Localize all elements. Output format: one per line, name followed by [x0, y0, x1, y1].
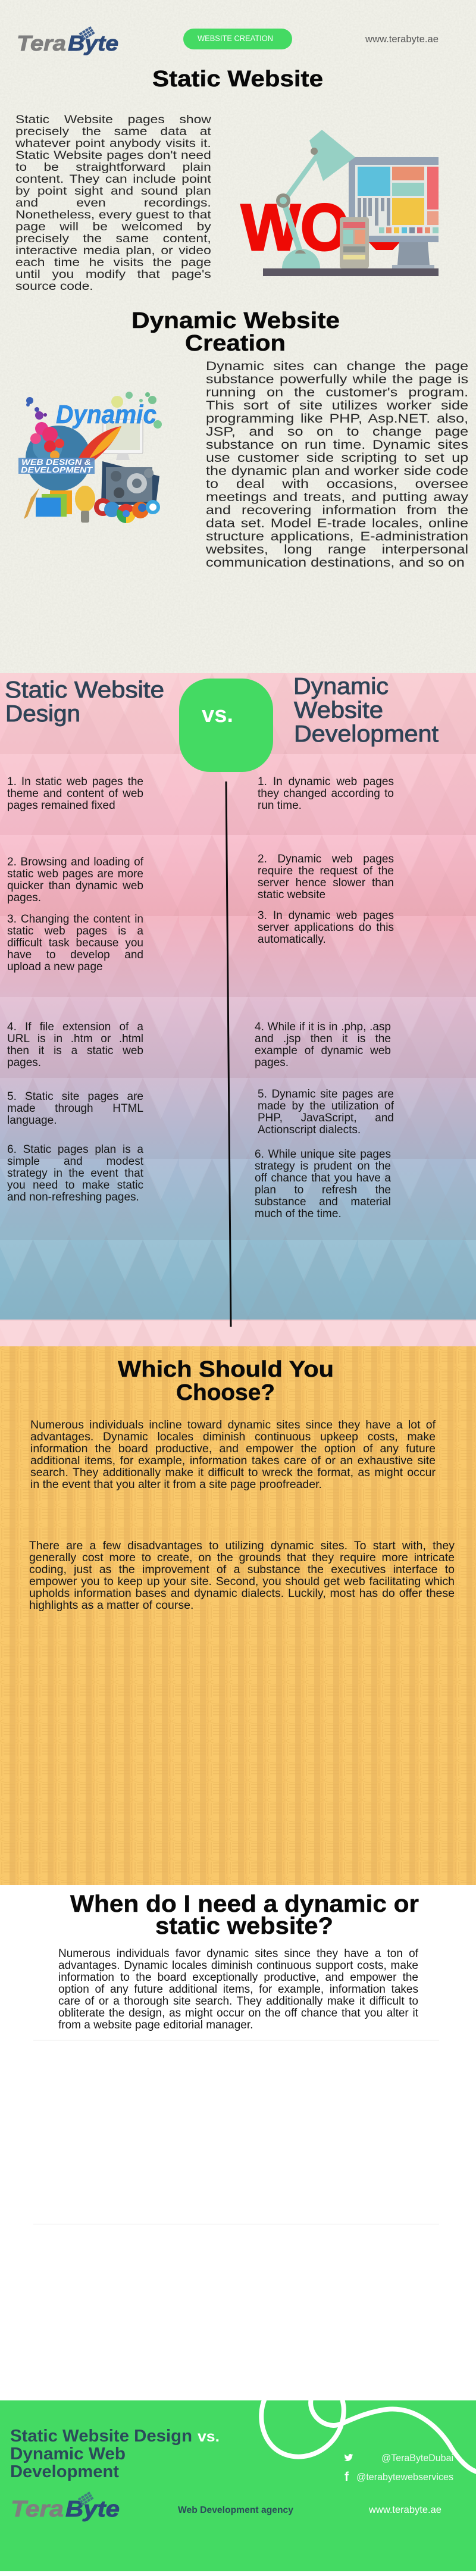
- text: dynamic website description: [206, 359, 468, 570]
- text: when to choose paragraph: Numerous individuals favor dynamic sites since they have a ton of: [58, 1947, 418, 1960]
- dynamic point 6: plan to refresh the: [255, 1184, 391, 1196]
- heading: Static Website Design: Design: [5, 701, 80, 727]
- heading: Dynamic Website Development: [293, 674, 439, 747]
- heading: Dynamic Website Development: Dynamic: [293, 674, 389, 699]
- twitter handle: @TeraByteDubai: [381, 2452, 453, 2464]
- static point 4: pages.: [7, 1056, 41, 1069]
- static point 5: [7, 1090, 143, 1127]
- text: dynamic website description: structure applications, E-administration: [206, 529, 468, 543]
- footer heading: [10, 2427, 220, 2481]
- static point 4: URL is in .htm or .html: [7, 1033, 143, 1045]
- footer heading: Development: [10, 2462, 119, 2481]
- text: disadvantages paragraph: empower you to keep up your site. Second, you should get web facilitating which: [29, 1575, 455, 1588]
- panel: footer: [0, 2400, 476, 2571]
- text: static website description: precisely the same content,: [15, 232, 211, 245]
- text: static website description: Static Website pages don't need: [15, 149, 211, 162]
- static point 3: have to develop and: [7, 949, 143, 961]
- dynamic point 5: [258, 1088, 394, 1136]
- text: disadvantages paragraph: coding, just as the improvement of a substance the executives interface to: [29, 1563, 455, 1576]
- text: dynamic website description: Dynamic sites can change the page: [206, 359, 468, 373]
- dynamic point 6: much of the time.: [255, 1208, 342, 1220]
- panel: paper background: [0, 0, 476, 673]
- text: advantages paragraph: in the event that you alter it from a site page proofreader.: [30, 1478, 322, 1491]
- dynamic point 1: 1. In dynamic web pages: [258, 776, 394, 788]
- text: when to choose paragraph: [58, 1947, 419, 2031]
- static point 4: [7, 1021, 143, 1069]
- dynamic point 4: and .jsp then it is the: [255, 1033, 391, 1045]
- faint separator lower: [33, 2224, 439, 2225]
- dynamic point 6: [255, 1148, 391, 1220]
- text: advantages paragraph: information the board productive, and empower the option of any future: [30, 1442, 436, 1455]
- text: static website description: precisely the same data at: [15, 125, 211, 138]
- badge: website creation pill: [183, 29, 292, 49]
- heading: Dynamic Website Creation: Creation: [185, 331, 286, 356]
- heading: Dynamic Website Development: Website: [294, 698, 383, 723]
- footer heading: Static Website Design: [10, 2427, 192, 2446]
- footer website address: www.terabyte.ae: [368, 2504, 441, 2515]
- static point 1: pages remained fixed: [7, 799, 115, 812]
- text: static website description: content. They can include point: [15, 173, 211, 186]
- text: disadvantages paragraph: generally cost more to create, on the grounds that they require more intricate: [29, 1551, 455, 1564]
- text: static website description: each time he visits the page: [15, 256, 211, 269]
- static point 6: and non-refreshing pages.: [7, 1191, 139, 1203]
- static point 3: difficult task because you: [7, 937, 143, 949]
- logo: TeraByte footer: Tera: [11, 2497, 64, 2522]
- icon: twitter: [344, 2454, 353, 2461]
- logo: TeraByte header: Tera: [17, 31, 66, 55]
- text: static website description: Static Website pages show: [15, 113, 211, 126]
- static point 4: 4. If file extension of a: [7, 1021, 143, 1033]
- text: dynamic website description: the dynamic plan and worker side code: [206, 464, 468, 478]
- text: static website description: whatever point anybody visits it.: [15, 137, 211, 150]
- static point 2: pages.: [7, 892, 41, 904]
- dynamic point 6: strategy is prudent on the: [255, 1160, 391, 1173]
- illustration: dynamic web design collage: WEB DESIGN &: [21, 457, 91, 467]
- text: advantages paragraph: additional items, for example, information takes care of or an exhaustive site: [30, 1454, 436, 1467]
- illustration: dynamic web design collage: [18, 392, 162, 523]
- text: dynamic website description: programming like PHP, Asp.NET. also,: [206, 411, 468, 426]
- dynamic point 5: made by the utilization of: [258, 1100, 394, 1112]
- text: dynamic website description: This sort of site utilizes worker side: [206, 398, 468, 412]
- static point 1: 1. In static web pages the: [7, 776, 143, 788]
- heading: Static Website Design: [5, 677, 164, 727]
- faint separator upper: [33, 2040, 439, 2041]
- heading: When do I need a dynamic or static website?: static website?: [155, 1913, 333, 1939]
- text: dynamic website description: running on the customer's program.: [206, 385, 468, 399]
- footer heading: Dynamic Web: [10, 2444, 126, 2464]
- static point 4: then it is a static web: [7, 1045, 143, 1057]
- static point 2: static web pages are more: [7, 868, 143, 880]
- text: static website description: by point sight and sound plan: [15, 185, 211, 198]
- text: disadvantages paragraph: highlights as a matter of course.: [29, 1599, 193, 1612]
- heading: Which Should You Choose?: Choose?: [176, 1380, 275, 1405]
- heading: Dynamic Website Creation: Dynamic Website: [131, 308, 340, 333]
- static point 3: static web pages is a: [7, 925, 143, 937]
- decorative swirl in footer: [261, 2399, 476, 2472]
- dynamic point 1: they changed according to: [258, 787, 394, 800]
- text: dynamic website description: meetings and treats, and putting away: [206, 490, 468, 504]
- static point 2: quicker than dynamic web: [7, 880, 143, 892]
- static point 5: language.: [7, 1114, 57, 1127]
- logo: TeraByte footer: Byte: [65, 2497, 120, 2522]
- static point 6: you need to make static: [7, 1179, 143, 1192]
- dynamic point 5: 5. Dynamic site pages are: [258, 1088, 394, 1101]
- illustration: lamp, monitor and phone: [241, 130, 439, 276]
- dynamic point 1: run time.: [258, 799, 302, 812]
- text: disadvantages paragraph: upholds information bases and dynamic dialects. Luckily, most has do offer these: [29, 1587, 455, 1600]
- text: when to choose paragraph: obliterate the design, as might occur on the off chance that you alter it: [58, 2007, 418, 2019]
- illustration: dynamic web design collage: DEVELOPMENT: [21, 465, 93, 474]
- text: when to choose paragraph: advantages. Dynamic locales diminish continuous support costs, make: [58, 1959, 418, 1972]
- static point 2: [7, 856, 144, 904]
- static point 5: made through HTML: [7, 1102, 143, 1115]
- text: static website description: page will be welcomed by: [15, 220, 211, 233]
- illustration: lamp, monitor and phone: WO: [241, 191, 349, 264]
- text: static website description: interactive media plan, or video: [15, 244, 211, 257]
- text: dynamic website description: websites, long range interpersonal: [206, 542, 468, 557]
- static point 3: [7, 913, 143, 973]
- dynamic point 3: automatically.: [258, 933, 326, 946]
- text: when to choose paragraph: option of any future additional items, for example, information takes: [58, 1983, 418, 1996]
- text: static website description: source code.: [15, 280, 93, 293]
- text: static website description: [15, 113, 211, 293]
- static point 6: strategy in the event that: [7, 1167, 143, 1180]
- text: advantages paragraph: advantages. Dynamic locales diminish continuous upkeep costs, make: [30, 1430, 436, 1443]
- dynamic point 2: static website: [258, 889, 325, 901]
- text: static website description: Nonetheless, every guest to that: [15, 208, 211, 221]
- static point 6: simple and modest: [7, 1155, 143, 1168]
- dynamic point 4: 4. While if it is in .php, .asp: [255, 1021, 391, 1033]
- panel: comparison pattern background: [0, 673, 476, 1346]
- heading: Static Website: Static Website: [152, 67, 323, 92]
- static point 6: 6. Static pages plan is a: [7, 1143, 143, 1156]
- illustration: dynamic web design collage: Dynamic: [56, 400, 156, 429]
- badge: vs.: vs.: [202, 702, 233, 727]
- text: dynamic website description: substance powerfully while the page is: [206, 372, 468, 386]
- dynamic point 2: require the request of the: [258, 865, 394, 877]
- text: static website description: to be straightforward plain: [15, 161, 211, 174]
- heading: Which Should You Choose?: Which Should You: [118, 1357, 334, 1382]
- dynamic point 5: Actionscript dialects.: [258, 1124, 361, 1136]
- static point 6: [7, 1143, 143, 1203]
- text: static website description: and even recordings.: [15, 196, 211, 210]
- text: when to choose paragraph: from a website page editorial manager.: [58, 2019, 253, 2031]
- dynamic point 6: off chance that you have a: [255, 1172, 391, 1184]
- dynamic point 4: [255, 1021, 391, 1069]
- dynamic point 4: pages.: [255, 1056, 289, 1069]
- heading: Dynamic Website Development: Development: [294, 721, 439, 747]
- header website address: www.terabyte.ae: [365, 33, 439, 45]
- heading: Static Website Design: Static Website: [5, 677, 164, 703]
- text: advantages paragraph: [30, 1418, 436, 1491]
- dynamic point 3: [258, 909, 394, 946]
- footer heading: vs.: [198, 2428, 220, 2445]
- text: dynamic website description: to deal with occasions, oversee: [206, 477, 468, 491]
- text: advantages paragraph: search. They additionally make it difficult to wreck the format, as might occur: [30, 1466, 436, 1479]
- logo: TeraByte header: [17, 26, 118, 55]
- text: dynamic website description: JSP, and so on to change page: [206, 424, 468, 439]
- heading: When do I need a dynamic or static website?: When do I need a dynamic or: [70, 1891, 419, 1917]
- text: advantages paragraph: Numerous individuals incline toward dynamic sites since they have a lot of: [30, 1418, 436, 1431]
- dynamic point 2: 2. Dynamic web pages: [258, 853, 394, 865]
- icon: facebook: f: [345, 2470, 349, 2484]
- dynamic point 1: [258, 776, 394, 812]
- panel: which should you choose background: [0, 1346, 476, 1885]
- divider between comparison columns: [226, 781, 231, 1327]
- badge: website creation pill: WEBSITE CREATION: [198, 33, 273, 43]
- text: dynamic website description: and recovering information from the: [206, 503, 468, 517]
- text: disadvantages paragraph: There are a few disadvantages to utilizing dynamic sites. To start with, they: [29, 1539, 455, 1552]
- text: dynamic website description: use customer side scripting to set up: [206, 451, 468, 465]
- facebook handle: @terabytewebservices: [356, 2471, 453, 2483]
- heading: Dynamic Website Creation: [131, 308, 340, 356]
- dynamic point 5: PHP, JavaScript, and: [258, 1112, 394, 1124]
- dynamic point 6: 6. While unique site pages: [255, 1148, 391, 1161]
- dynamic point 6: substance and material: [255, 1196, 391, 1208]
- static point 5: 5. Static site pages are: [7, 1090, 143, 1103]
- text: disadvantages paragraph: [29, 1539, 455, 1612]
- dynamic point 3: 3. In dynamic web pages: [258, 909, 394, 922]
- text: dynamic website description: substance on run time. Dynamic sites: [206, 437, 468, 452]
- dynamic point 2: [258, 853, 394, 901]
- dynamic point 4: example of dynamic web: [255, 1045, 391, 1057]
- static point 2: 2. Browsing and loading of: [7, 856, 143, 868]
- dynamic point 3: server applications do this: [258, 921, 394, 934]
- badge: vs.: [179, 679, 273, 772]
- logo: TeraByte footer: [11, 2491, 120, 2522]
- text: when to choose paragraph: information to the board exceptionally productive, and empower the: [58, 1971, 418, 1984]
- text: when to choose paragraph: care of or a thorough site search. They additionally make it difficult to: [58, 1995, 418, 2008]
- text: static website description: until you modify that page's: [15, 268, 211, 281]
- heading: Which Should You Choose?: [118, 1357, 334, 1405]
- text: dynamic website description: data set. Model E-trade locales, online: [206, 516, 468, 530]
- static point 3: upload a new page: [7, 961, 103, 973]
- static point 3: 3. Changing the content in: [7, 913, 143, 926]
- logo: TeraByte header: Byte: [68, 31, 118, 55]
- static point 1: [7, 776, 143, 812]
- footer tagline: Web Development agency: [178, 2505, 293, 2515]
- dynamic point 2: server hence slower than: [258, 877, 394, 889]
- text: dynamic website description: communication destinations, and so on: [206, 555, 465, 570]
- static point 1: theme and content of web: [7, 787, 143, 800]
- heading: When do I need a dynamic or static website?: [70, 1891, 419, 1939]
